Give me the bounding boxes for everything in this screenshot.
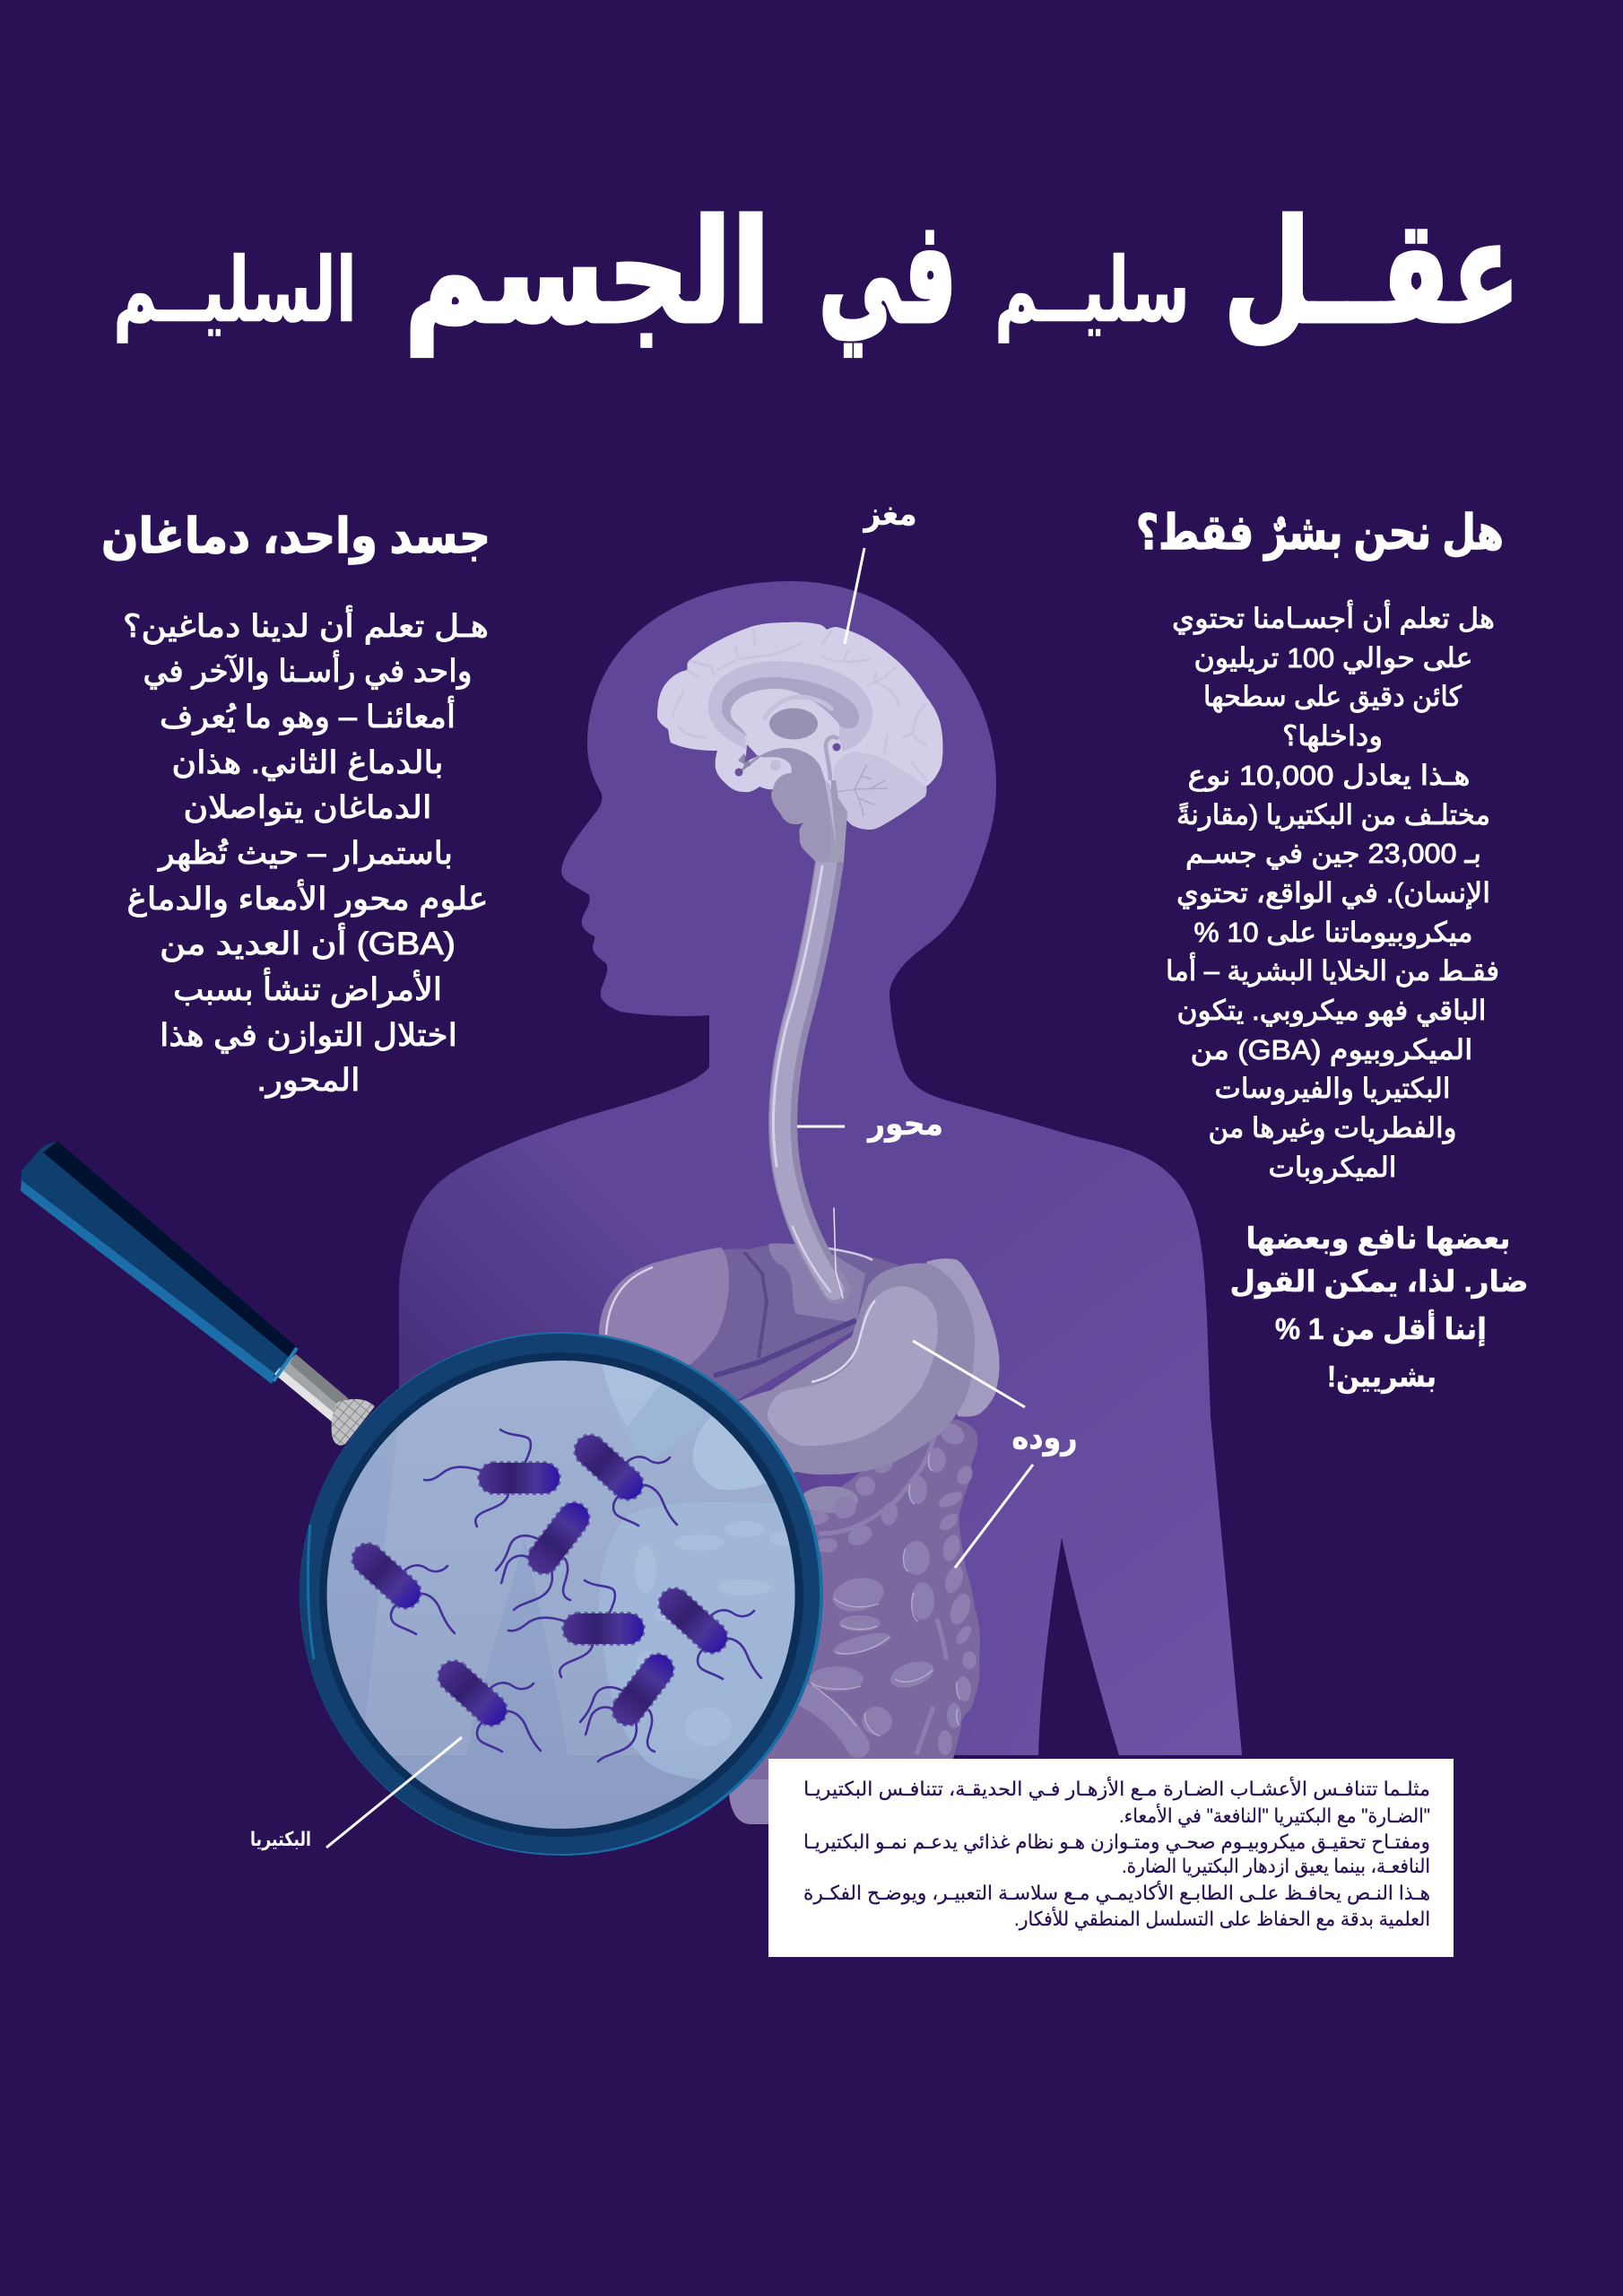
label: bacteria: البكتيريا: [250, 1828, 311, 1851]
left paragraph: اختلال التوازن في هذا: [160, 1018, 457, 1054]
right paragraph: على حوالي 100 تريليون: [1194, 642, 1472, 674]
panel: white note box: ومفتـاح تحقيـق ميكروبيـوم صحـي ومتـوازن هـو نظام غذائي يدعـم نمـو البكتيريـا: [803, 1831, 1430, 1854]
right heading: هل نحن بشرٌ فقط؟: [1136, 506, 1504, 561]
right paragraph: هـذا يعادل 10,000 نوع: [1187, 760, 1471, 792]
panel: white note box: "الضـارة" مع البكتيريا "النافعة" في الأمعاء.: [1119, 1804, 1430, 1828]
cerebellum: [834, 752, 926, 830]
panel: white note box: العلمية بدقة مع الحفاظ على التسلسل المنطقي للأفكار.: [1014, 1907, 1430, 1931]
handle: [21, 1141, 375, 1446]
title: في: [819, 194, 957, 356]
left paragraph: (GBA) أن العديد من: [160, 923, 456, 962]
right callout: بعضها نافع وبعضها: [1246, 1222, 1510, 1257]
label: bacteria: [250, 1737, 462, 1851]
right paragraph: بـ 23,000 جين في جسـم: [1185, 838, 1481, 870]
bacterium 8: [432, 1655, 541, 1752]
right paragraph: ميكروبيوماتنا على 10 %: [1194, 917, 1472, 949]
right callout: [1230, 1222, 1528, 1395]
bacterium 6: [653, 1582, 761, 1679]
right paragraph: فقـط من الخلايا البشرية – أما: [1166, 952, 1499, 987]
left paragraph: باستمرار – حيث تُظهر: [157, 836, 453, 872]
right paragraph: البكتيريا والفيروسات: [1214, 1073, 1451, 1105]
rim: [299, 1332, 823, 1856]
left paragraph: [123, 605, 489, 1099]
bacterium 1: [424, 1430, 560, 1526]
human body silhouette: [361, 581, 1242, 1755]
bacterium 5: [508, 1580, 644, 1677]
panel: right column: [1136, 506, 1528, 1395]
right callout: بشريين!: [1327, 1360, 1436, 1395]
panel: white note box: [768, 1759, 1454, 1957]
spinal cord / axis tube: [773, 862, 843, 1298]
panel: white note box: مثلـما تتنافـس الأعشـاب الضـارة مـع الأزهـار فـي الحديقـة، تتنافـس البكتيريـا: [803, 1777, 1430, 1801]
right paragraph: الميكروبيوم (GBA) من: [1191, 1034, 1472, 1066]
label: brain: مغز: [863, 495, 916, 533]
left paragraph: بالدماغ الثاني. هذان: [172, 745, 443, 781]
digestive organs: liver, stomach, intestines: [599, 1243, 1000, 1823]
title: السليــم: [113, 240, 357, 344]
panel: left column: [101, 509, 490, 1099]
magnifying glass: [21, 1141, 823, 1856]
bacterium 4: [346, 1537, 455, 1634]
bacterium 2: [568, 1429, 677, 1526]
bacteria: [346, 1429, 761, 1761]
bacterium 3: [496, 1497, 595, 1610]
panel: white note box: النافعـة، بينما يعيق ازدهار البكتيريا الضارة.: [1122, 1855, 1430, 1878]
brain: [657, 622, 943, 862]
right callout: إننا أقل من 1 %: [1275, 1309, 1487, 1347]
panel: white note box: هـذا النـص يحافـظ علـى الطابـع الأكاديمـي مـع سلاسـة التعبيـر، ويوضـح الفكـرة: [803, 1881, 1430, 1905]
right callout: ضار. لذا، يمكن القول: [1230, 1265, 1528, 1300]
left paragraph: علوم محور الأمعاء والدماغ: [127, 879, 488, 918]
label: axis: محور: [866, 1105, 943, 1143]
label: gut: [913, 1341, 1078, 1568]
left heading: جسد واحد، دماغان: [101, 509, 490, 564]
right paragraph: الإنسان). في الواقع، تحتوي: [1176, 877, 1490, 909]
left paragraph: المحور.: [256, 1063, 360, 1099]
left paragraph: أمعائنـا – وهو ما يُعرف: [160, 696, 456, 735]
left paragraph: الأمراض تنشأ بسبب: [173, 968, 442, 1008]
left paragraph: هـل تعلم أن لدينا دماغين؟: [123, 605, 489, 645]
lens: [326, 1361, 794, 1829]
bacterium 7: [580, 1648, 680, 1761]
label: gut: روده: [1011, 1419, 1078, 1457]
right paragraph: الميكروبات: [1268, 1152, 1397, 1184]
left paragraph: الدماغان يتواصلان: [183, 790, 432, 826]
left paragraph: واحد في رأسـنا والآخر في: [143, 650, 472, 690]
title: [113, 194, 1520, 356]
right paragraph: مختلـف من البكتيريا (مقارنةً: [1176, 799, 1490, 831]
right paragraph: والفطريات وغيرها من: [1209, 1112, 1456, 1144]
label: brain: [845, 495, 916, 644]
right paragraph: الباقي فهو ميكروبي. يتكون: [1176, 995, 1487, 1027]
title: الجسم: [404, 194, 770, 356]
brain stem: [759, 748, 838, 862]
right paragraph: هل تعلم أن أجسـامنا تحتوي: [1172, 600, 1495, 635]
title: سليــم: [994, 240, 1190, 344]
right paragraph: كائن دقيق على سطحها: [1203, 681, 1462, 713]
right paragraph: [1166, 600, 1499, 1184]
right paragraph: وداخلها؟: [1282, 720, 1383, 752]
corpus callosum bands: [708, 661, 872, 752]
